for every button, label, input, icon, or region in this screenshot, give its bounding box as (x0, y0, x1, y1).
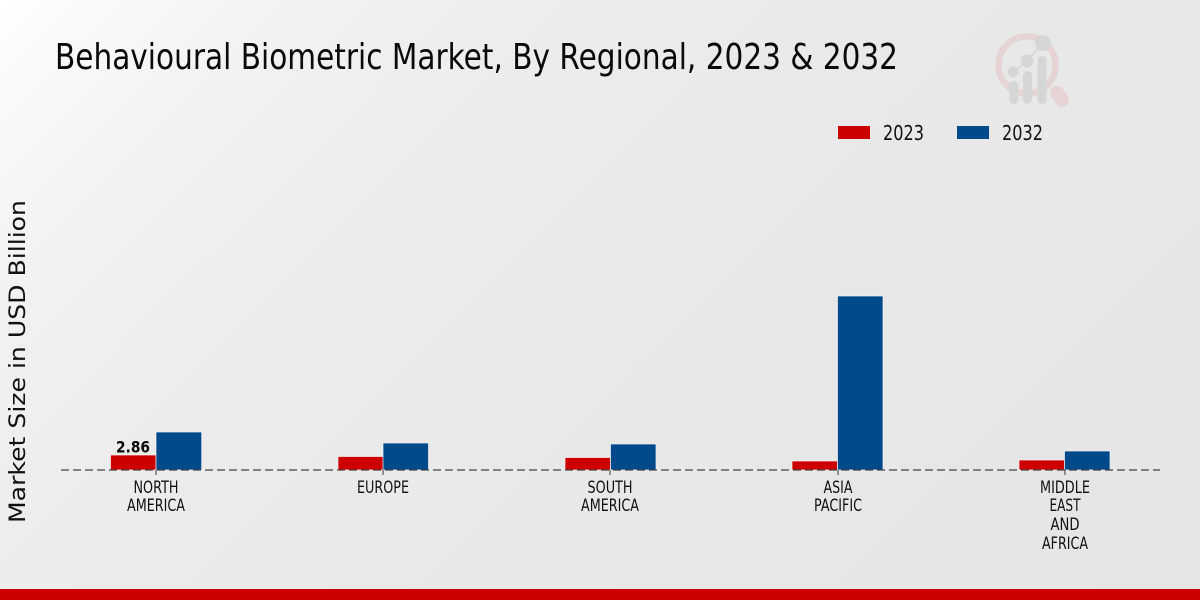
label: South America: AMERICA (581, 496, 640, 515)
label: South America: SOUTH (588, 478, 632, 497)
legend item: 2023 (838, 121, 924, 145)
North America bars (110, 432, 202, 470)
label: Middle East and Africa: MIDDLE (1040, 478, 1090, 497)
label: North America (127, 470, 186, 515)
label: Asia Pacific: PACIFIC (814, 496, 862, 515)
label: Middle East and Africa: EAST (1050, 496, 1081, 515)
legend item: 2023: 2023 (883, 121, 924, 145)
Middle East and Africa bars (1019, 451, 1110, 470)
icon: watermark logo (998, 35, 1062, 104)
category labels (127, 470, 1090, 553)
South America bars (565, 444, 656, 470)
value label: 2.86: 2.86 (116, 438, 150, 456)
dashed baseline (61, 469, 1160, 471)
label: Europe: EUROPE (357, 478, 409, 497)
label: Europe (357, 470, 409, 497)
label: Middle East and Africa: AND (1050, 515, 1080, 534)
Asia Pacific bars (792, 296, 883, 470)
legend (838, 121, 1043, 145)
label: North America: AMERICA (127, 496, 186, 515)
label: North America: NORTH (134, 478, 178, 497)
bar chart (110, 296, 1110, 470)
legend item: 2032: 2032 (1002, 121, 1043, 145)
label: Middle East and Africa (1040, 470, 1090, 553)
Europe bars (338, 443, 428, 470)
label: Asia Pacific: ASIA (824, 478, 853, 497)
footer bar (0, 589, 1200, 600)
legend item: 2032 (957, 121, 1043, 145)
label: Asia Pacific (814, 470, 862, 515)
y-axis label: Market Size in USD Billion (5, 200, 31, 523)
title: Behavioural Biometric Market, By Regional, 2023 & 2032 (55, 37, 898, 78)
label: South America (581, 470, 640, 515)
label: Middle East and Africa: AFRICA (1042, 534, 1089, 553)
